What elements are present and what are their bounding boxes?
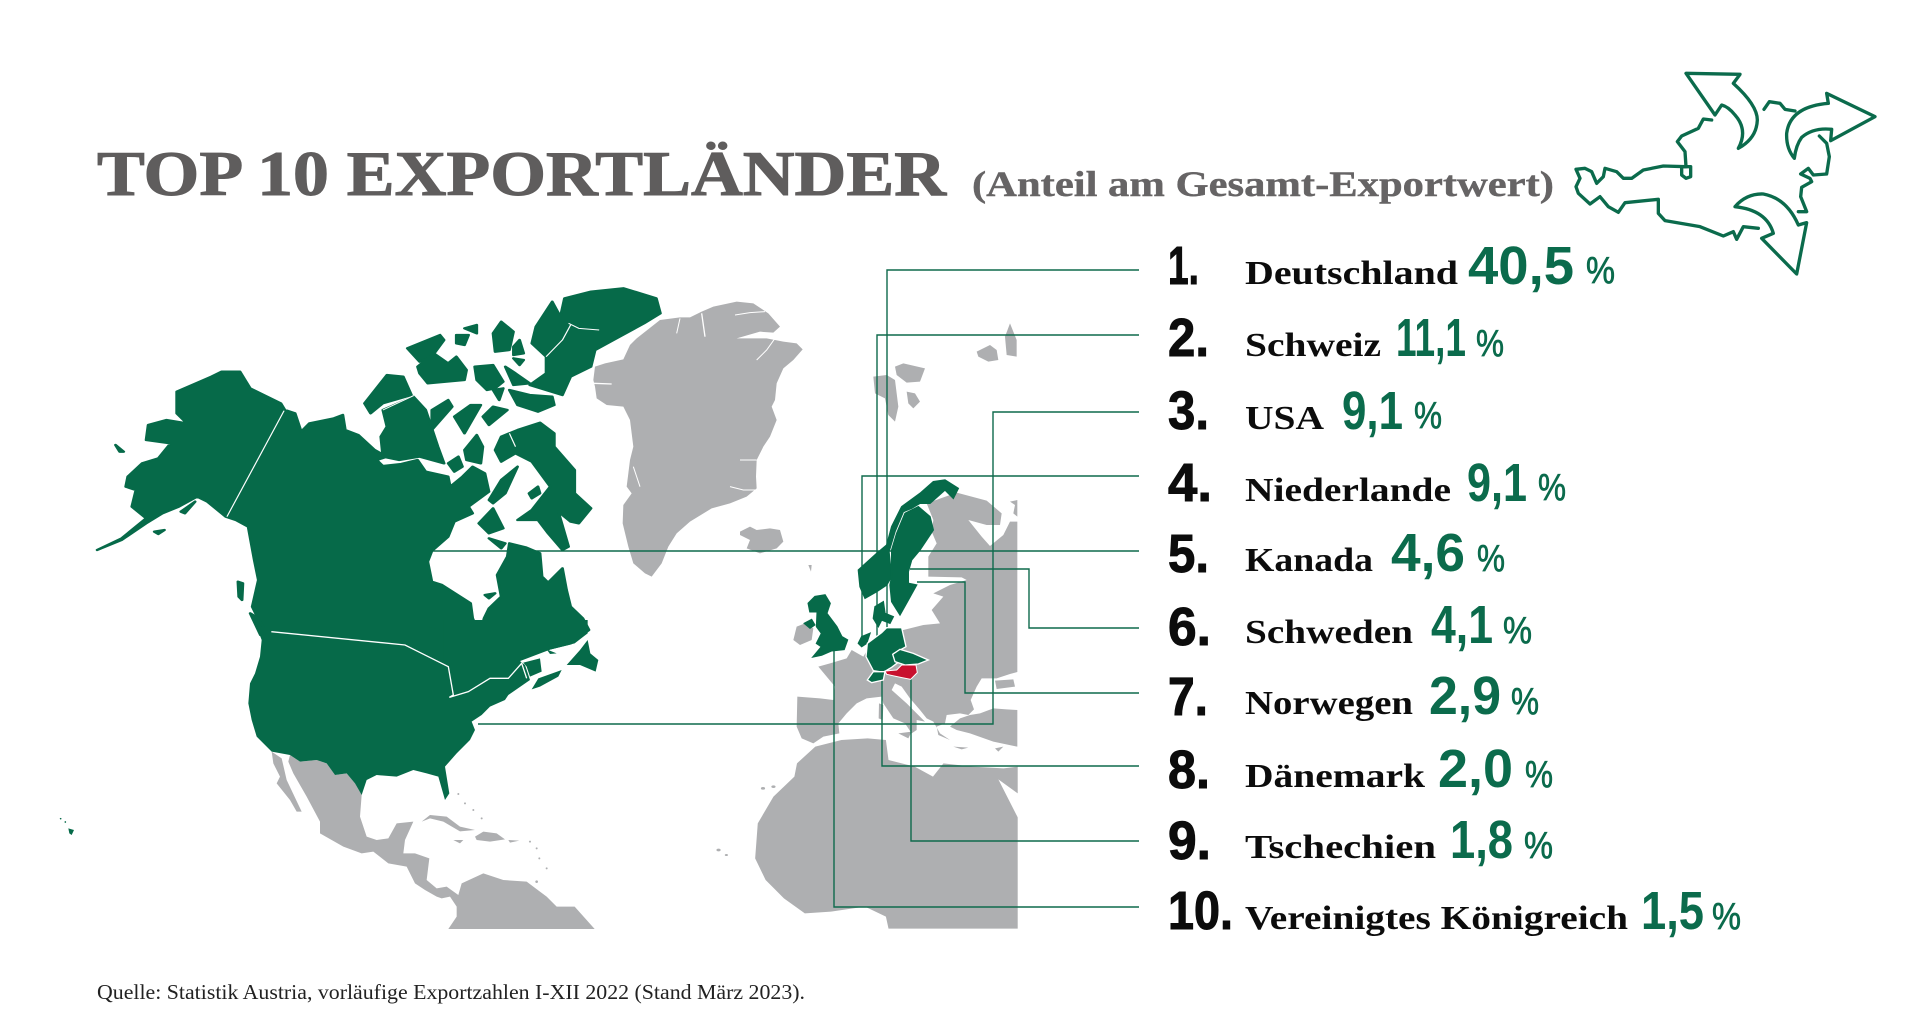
row 3: USA xyxy=(1168,381,1442,441)
row 8: Dänemark: 2,0 xyxy=(1438,739,1513,799)
row 1: Deutschland: 40,5 xyxy=(1468,236,1574,296)
row 10: Vereinigtes Königreich xyxy=(1168,881,1741,941)
row 1: Deutschland: % xyxy=(1586,250,1615,292)
row 10: Vereinigtes Königreich: Vereinigtes Königreich xyxy=(1245,900,1628,937)
Sweden xyxy=(890,507,933,615)
row 6: Schweden: Schweden xyxy=(1245,614,1413,651)
Switzerland xyxy=(867,672,885,683)
row 9: Tschechien: Tschechien xyxy=(1245,829,1436,866)
row 8: Dänemark: % xyxy=(1525,754,1553,796)
row 7: Norwegen: % xyxy=(1511,681,1539,723)
gray land: Greenland, Iceland, Svalbard xyxy=(593,302,1017,577)
row 3: USA: 3. xyxy=(1168,381,1209,441)
row 8: Dänemark: 8. xyxy=(1168,740,1210,800)
row 5: Kanada: % xyxy=(1477,538,1505,580)
leader line: Schweden xyxy=(910,569,1139,628)
leader line: Kanada xyxy=(432,550,1139,552)
source note: Quelle: Statistik Austria, vorläufige Exportzahlen I-XII 2022 (Stand März 2023). xyxy=(97,980,805,1004)
leader line: USA xyxy=(478,412,1139,724)
icon: Austria outline with export arrows xyxy=(1576,73,1875,274)
gray land: Africa and Arabia xyxy=(716,738,1018,929)
row 6: Schweden: 6. xyxy=(1168,597,1211,657)
Netherlands xyxy=(858,633,870,647)
leader line: Schweiz xyxy=(877,335,1139,673)
United Kingdom xyxy=(808,595,847,657)
row 2: Schweiz xyxy=(1168,308,1504,368)
row 2: Schweiz: Schweiz xyxy=(1245,327,1381,364)
row 5: Kanada: 5. xyxy=(1168,524,1209,584)
leader line: Dänemark xyxy=(882,680,1139,766)
green land: USA and south-east Canada xyxy=(60,620,598,835)
row 9: Tschechien: 9. xyxy=(1168,811,1211,871)
green land: Alaska, Canada and Arctic islands xyxy=(97,288,660,660)
leader line: Niederlande xyxy=(862,476,1139,640)
row 5: Kanada: Kanada xyxy=(1245,542,1373,579)
Denmark xyxy=(873,602,893,627)
row 7: Norwegen: 2,9 xyxy=(1429,666,1501,726)
gray land: Europe and Russia xyxy=(793,493,1017,752)
row 6: Schweden: % xyxy=(1503,610,1532,652)
row 4: Niederlande: 4. xyxy=(1168,453,1212,513)
row 8: Dänemark xyxy=(1168,739,1553,800)
row 2: Schweiz: 11,1 xyxy=(1396,308,1466,368)
row 4: Niederlande: Niederlande xyxy=(1245,472,1451,509)
row 2: Schweiz: 2. xyxy=(1168,308,1209,368)
Austria highlighted in red xyxy=(885,665,917,679)
ranking list xyxy=(1168,236,1741,941)
leader line: Norwegen xyxy=(917,582,1139,693)
row 10: Vereinigtes Königreich: 10. xyxy=(1168,881,1233,941)
row 6: Schweden xyxy=(1168,595,1532,657)
row 9: Tschechien: 1,8 xyxy=(1450,810,1513,870)
row 8: Dänemark: Dänemark xyxy=(1245,758,1425,795)
row 7: Norwegen xyxy=(1168,666,1539,727)
leader line: Vereinigtes Königreich xyxy=(834,650,1139,907)
row 4: Niederlande xyxy=(1168,453,1566,513)
row 6: Schweden: 4,1 xyxy=(1431,595,1493,655)
row 5: Kanada: 4,6 xyxy=(1391,523,1465,583)
row 10: Vereinigtes Königreich: % xyxy=(1712,896,1741,938)
row 7: Norwegen: 7. xyxy=(1168,667,1208,727)
world map xyxy=(60,270,1139,929)
row 4: Niederlande: 9,1 xyxy=(1467,453,1527,513)
leader lines xyxy=(432,270,1139,907)
row 1: Deutschland: 1. xyxy=(1168,236,1199,296)
green land: Europe export countries xyxy=(804,480,958,683)
gray land: Mexico, Central and South America, Caribbean xyxy=(272,752,595,929)
Norway xyxy=(858,480,958,598)
row 3: USA: 9,1 xyxy=(1342,381,1403,441)
row 1: Deutschland xyxy=(1168,236,1615,296)
Northern Ireland xyxy=(804,619,815,628)
row 7: Norwegen: Norwegen xyxy=(1245,685,1413,722)
leader line: Tschechien xyxy=(911,677,1139,841)
row 1: Deutschland: Deutschland xyxy=(1245,255,1458,292)
Czechia xyxy=(893,649,928,665)
row 10: Vereinigtes Königreich: 1,5 xyxy=(1641,881,1704,941)
row 4: Niederlande: % xyxy=(1538,467,1566,509)
row 9: Tschechien xyxy=(1168,810,1553,871)
Germany xyxy=(866,628,906,672)
row 9: Tschechien: % xyxy=(1524,825,1553,867)
title: TOP 10 EXPORTLÄNDER xyxy=(97,139,948,209)
leader line: Deutschland xyxy=(887,270,1139,630)
row 3: USA: USA xyxy=(1245,400,1325,437)
row 2: Schweiz: % xyxy=(1476,323,1504,365)
row 3: USA: % xyxy=(1414,395,1442,437)
row 5: Kanada xyxy=(1168,523,1505,584)
subtitle: (Anteil am Gesamt-Exportwert) xyxy=(972,164,1554,204)
